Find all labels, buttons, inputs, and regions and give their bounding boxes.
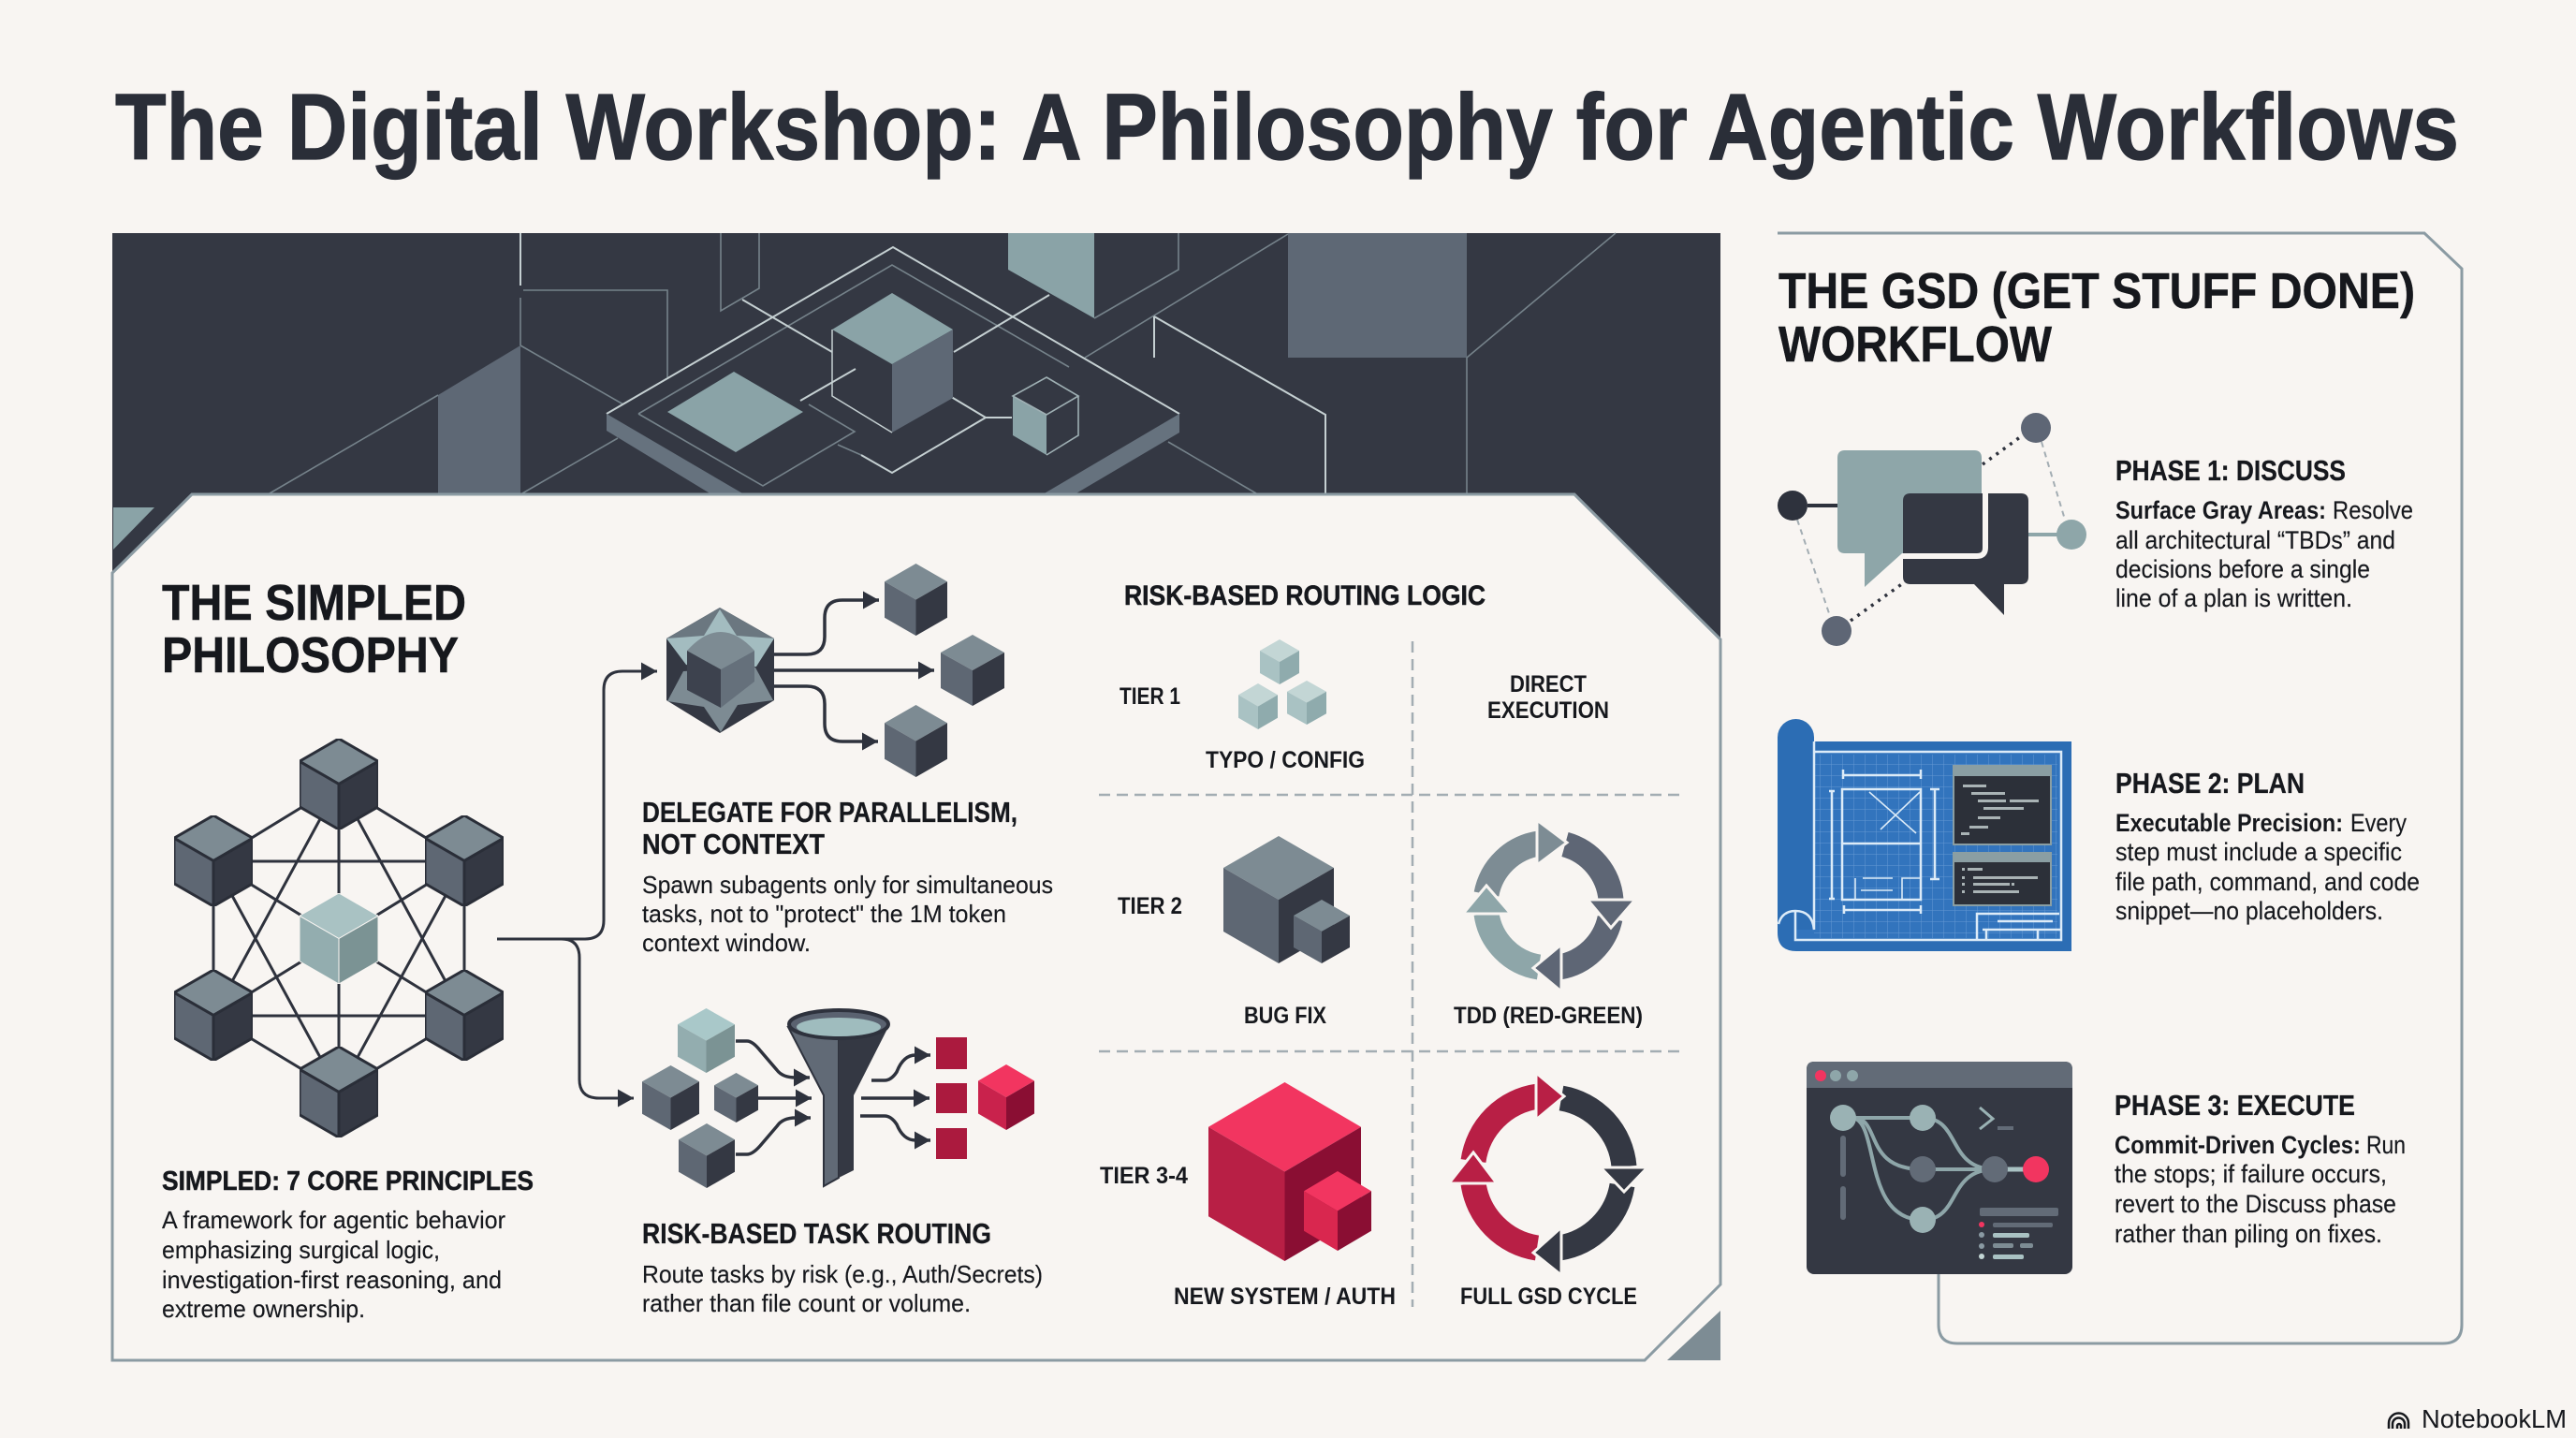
text: phase 3 execute: the stops; if failure occurs,: [2115, 1160, 2387, 1188]
text: phase 1 discuss: all architectural “TBDs” and: [2115, 526, 2395, 554]
panel: gsd workflow outline: [1778, 233, 2462, 1343]
icons: subagent cubes with arrows: [774, 564, 1004, 777]
heading: gsd workflow: [1778, 263, 2415, 373]
text: phase 1 discuss: decisions before a single: [2115, 555, 2370, 583]
text: phase 3 execute: PHASE 3: EXECUTE: [2115, 1089, 2355, 1122]
text: phase 3 execute: revert to the Discuss phase: [2115, 1190, 2396, 1218]
tier 1 row: DIRECT: [1510, 671, 1587, 697]
text: phase 3 execute: Commit-Driven Cycles:: [2115, 1131, 2361, 1159]
arrow: hub to delegate and routing: [497, 671, 657, 1098]
tier 2 row: TIER 2: [1118, 893, 1182, 919]
text: phase 1 discuss: Resolve: [2333, 496, 2413, 524]
heading: gsd workflow: THE GSD (GET STUFF DONE): [1778, 263, 2415, 319]
text: risk-based task routing: [642, 1217, 1043, 1317]
text: phase 2 plan: Executable Precision:: [2115, 809, 2343, 837]
tier 3-4 row: FULL GSD CYCLE: [1460, 1284, 1637, 1310]
tier 1 row: TIER 1: [1120, 683, 1180, 710]
icon: blueprint: [1778, 719, 2071, 951]
text: phase 2 plan: Every: [2350, 809, 2407, 837]
text: phase 2 plan: [2115, 767, 2420, 925]
text: delegate for parallelism: tasks, not to "protect" the 1M token: [642, 900, 1006, 928]
heading: the simpled philosophy: PHILOSOPHY: [162, 627, 459, 683]
text: delegate for parallelism: context window.: [642, 929, 811, 957]
heading: the simpled philosophy: [162, 575, 466, 683]
icon: orchestrator star cube: [666, 608, 774, 733]
tier 3-4 row: [1100, 1073, 1647, 1310]
tier 3-4 row: TIER 3-4: [1100, 1163, 1188, 1189]
tier 1 row: TYPO / CONFIG: [1206, 747, 1365, 773]
text: phase 1 discuss: [2115, 454, 2413, 612]
logo: notebooklm: NotebookLM: [2422, 1404, 2567, 1433]
text: phase 1 discuss: line of a plan is written.: [2115, 584, 2352, 612]
heading: the simpled philosophy: THE SIMPLED: [162, 575, 466, 631]
icon: terminal with commit graph: [1807, 1062, 2072, 1274]
text: risk-based task routing: rather than file count or volume.: [642, 1289, 971, 1317]
text: simpled 7 core principles: A framework for agentic behavior: [162, 1206, 505, 1234]
text: delegate for parallelism: NOT CONTEXT: [642, 828, 825, 860]
heading: gsd workflow: WORKFLOW: [1778, 316, 2052, 373]
text: phase 2 plan: file path, command, and code: [2115, 868, 2420, 896]
diagram: seven principle hub network: [174, 739, 504, 1137]
tier 2 row: TDD (RED-GREEN): [1454, 1003, 1643, 1029]
panel: the simpled philosophy background: [112, 494, 1720, 1360]
text: phase 1 discuss: Surface Gray Areas:: [2115, 496, 2326, 524]
text: delegate for parallelism: [642, 796, 1053, 957]
text: risk-based task routing: RISK-BASED TASK ROUTING: [642, 1217, 991, 1250]
icon: tdd cycle: [1463, 820, 1635, 991]
text: phase 2 plan: PHASE 2: PLAN: [2115, 767, 2305, 800]
tier 1 row: EXECUTION: [1487, 697, 1609, 724]
text: simpled 7 core principles: emphasizing surgical logic,: [162, 1236, 440, 1264]
tier 2 row: BUG FIX: [1244, 1003, 1326, 1029]
tier 2 row: [1118, 820, 1643, 1029]
text: delegate for parallelism: Spawn subagents only for simultaneous: [642, 871, 1053, 899]
text: simpled 7 core principles: extreme ownership.: [162, 1295, 365, 1323]
icon: discussion bubbles and nodes: [1778, 413, 2086, 646]
corner accent top left: [113, 507, 154, 550]
text: phase 3 execute: rather than piling on fixes.: [2115, 1220, 2382, 1248]
text: phase 2 plan: step must include a specific: [2115, 838, 2402, 866]
icon: risk funnel routing: [642, 1008, 1034, 1188]
text: phase 3 execute: Run: [2366, 1131, 2406, 1159]
heading: risk-based routing logic: RISK-BASED ROUTING LOGIC: [1124, 580, 1486, 611]
text: phase 1 discuss: PHASE 1: DISCUSS: [2115, 454, 2346, 487]
text: phase 3 execute: [2115, 1089, 2406, 1248]
text: simpled 7 core principles: investigation-first reasoning, and: [162, 1266, 502, 1294]
banner: isometric geometric artwork: [112, 233, 1720, 640]
corner accent bottom right: [1667, 1311, 1720, 1360]
text: phase 2 plan: snippet—no placeholders.: [2115, 897, 2383, 925]
tier 1 row: [1120, 639, 1609, 773]
icon: full gsd cycle: [1449, 1073, 1647, 1275]
tier 3-4 row: NEW SYSTEM / AUTH: [1174, 1284, 1396, 1310]
text: simpled 7 core principles: [162, 1167, 534, 1323]
text: simpled 7 core principles: SIMPLED: 7 CORE PRINCIPLES: [162, 1167, 534, 1196]
text: delegate for parallelism: DELEGATE FOR PARALLELISM,: [642, 796, 1017, 829]
text: risk-based task routing: Route tasks by risk (e.g., Auth/Secrets): [642, 1260, 1043, 1288]
